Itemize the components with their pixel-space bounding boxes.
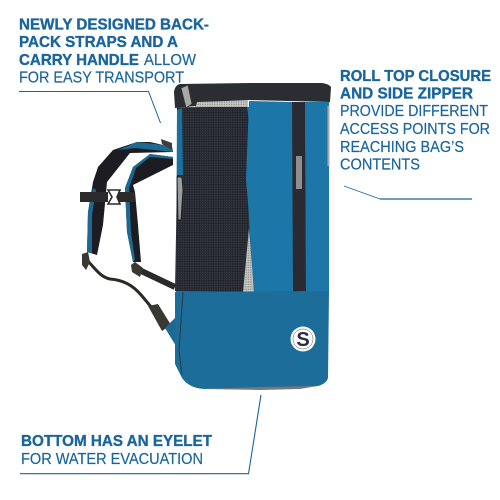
description: roll top: PROVIDE DIFFERENT — [340, 103, 488, 120]
backpack illustration — [80, 83, 331, 390]
grey mesh upper band — [195, 100, 248, 107]
outer pad blue edge — [87, 142, 173, 253]
description: roll top: ACCESS POINTS FOR — [340, 121, 490, 138]
grey mesh lower sliver — [243, 228, 254, 292]
bag blue base underlay — [176, 107, 329, 292]
leader line: straps — [19, 92, 160, 123]
strap buckles — [82, 252, 171, 331]
description: straps — [19, 52, 196, 87]
description: straps: ALLOW — [144, 52, 196, 69]
mesh pocket — [175, 106, 253, 292]
description: straps: FOR EASY TRANSPORT — [19, 70, 184, 87]
webbing: outer lower strap — [85, 258, 167, 326]
inner shoulder pad — [125, 154, 173, 262]
outer shoulder pad — [87, 142, 173, 255]
heading: roll top: ROLL TOP CLOSURE — [340, 68, 491, 85]
inner pad blue edge — [125, 154, 173, 262]
heading: straps — [19, 16, 209, 69]
black vertical strap — [292, 102, 306, 292]
heading: straps: PACK STRAPS AND A — [19, 34, 178, 51]
base grey edge — [204, 386, 318, 390]
roll top closure — [174, 83, 331, 108]
heading: roll top — [340, 68, 491, 102]
side zipper top — [181, 85, 192, 108]
description: roll top: CONTENTS — [340, 156, 420, 174]
heading: straps: NEWLY DESIGNED BACK- — [19, 16, 209, 33]
heading: roll top: AND SIDE ZIPPER — [340, 86, 473, 102]
blue front panel — [246, 101, 292, 292]
leader line: roll top — [344, 186, 472, 199]
webbing: inner lower strap — [135, 268, 175, 287]
side seam — [179, 292, 183, 375]
description: roll top — [340, 103, 490, 174]
bottom blue section — [175, 291, 329, 389]
callout: roll top closure and side zipper — [340, 68, 491, 199]
grey mesh right edge — [328, 106, 330, 166]
strap label — [296, 156, 302, 189]
callout: backpack straps and carry handle — [19, 16, 209, 123]
blue right panel — [305, 102, 329, 291]
side zipper pull — [177, 177, 183, 220]
heading: straps: CARRY HANDLE — [19, 52, 139, 69]
leader line: eyelet — [20, 395, 261, 474]
chest strap with buckle — [80, 190, 135, 204]
left blue side stripe — [177, 108, 183, 175]
logo letter: S — [296, 329, 310, 351]
brand logo badge — [290, 326, 316, 352]
carry handle clip — [161, 139, 172, 150]
description: eyelet: FOR WATER EVACUATION — [21, 451, 203, 468]
backpack straps — [80, 139, 176, 346]
heading: eyelet: BOTTOM HAS AN EYELET — [21, 433, 213, 450]
base wedge — [165, 318, 176, 346]
description: roll top: REACHING BAG’S — [340, 139, 464, 156]
callout: bottom eyelet — [20, 395, 261, 474]
